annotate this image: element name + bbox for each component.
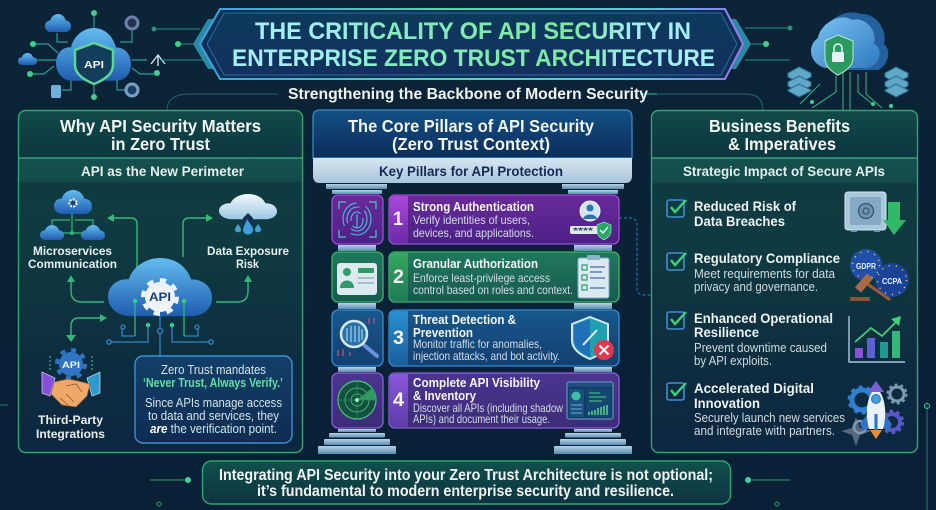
arrows around API cloud <box>66 214 252 342</box>
bottom callout <box>202 461 730 504</box>
card: Discover all APIs (including shadow <box>413 401 563 415</box>
icon: dashboard <box>567 382 613 419</box>
text <box>694 198 796 229</box>
text: Reduced Risk of <box>694 198 796 214</box>
icon: third-party handshake: API <box>62 360 80 371</box>
title text <box>232 18 715 72</box>
icon: rocket with gears <box>841 381 906 446</box>
card: Complete API Visibility <box>413 375 541 390</box>
heading: Business Benefits <box>709 116 850 136</box>
icon: safe and down arrow <box>845 192 906 235</box>
label: microservices communication <box>28 244 117 271</box>
panel: why API security matters <box>18 110 302 452</box>
label: third-party integrations <box>36 413 105 441</box>
card: & Inventory <box>413 388 477 403</box>
card: 4 <box>393 390 404 411</box>
icon: central API cloud and gear <box>108 258 212 336</box>
label: data exposure risk: Risk <box>236 257 259 271</box>
panel header: The Core Pillars of API Security <box>348 116 594 136</box>
card: Threat Detection & <box>413 312 516 327</box>
icon: user and password shield <box>570 201 611 240</box>
text: privacy and governance. <box>694 280 818 294</box>
icon: shield with red cross <box>572 317 614 360</box>
panel header: Key Pillars for API Protection <box>379 163 563 179</box>
card: 1 <box>393 209 403 230</box>
subtitle: Strengthening the Backbone of Modern Security <box>288 86 648 103</box>
text: Accelerated Digital <box>694 380 814 396</box>
bottom callout: it’s fundamental to modern enterprise security and resilience. <box>257 483 674 500</box>
benefit 3: operational resilience <box>667 310 905 368</box>
card: injection attacks, and bot activity. <box>413 349 560 363</box>
heading: & Imperatives <box>728 134 836 154</box>
label: microservices communication: Microservices <box>33 244 112 258</box>
card <box>389 195 619 244</box>
icon: ID card <box>332 252 383 302</box>
circuit traces under API cloud <box>107 316 213 356</box>
text: by API exploits. <box>694 354 772 368</box>
text <box>694 310 833 368</box>
label: data exposure risk: Data Exposure <box>207 244 289 258</box>
icon: growth chart <box>849 316 905 362</box>
icon: checkbox <box>667 383 686 400</box>
icon: shield with API label <box>75 43 113 84</box>
label: data exposure risk <box>207 244 289 271</box>
banner side connectors <box>152 26 792 60</box>
icon: GDPR CCPA badges with gavel: CCPA <box>882 277 902 286</box>
icon: user and password shield: **** <box>573 226 594 236</box>
icon: left server stack <box>788 67 811 97</box>
callout: never trust, always verify: Since APIs manage access <box>145 396 282 410</box>
benefit 1: reduced risk <box>667 192 906 235</box>
callout: never trust, always verify: ‘Never Trust, Always Verify.’ <box>143 376 283 390</box>
heading <box>709 116 850 154</box>
title text: THE CRITICALITY OF API SECURITY IN <box>255 18 691 45</box>
callout: never trust, always verify: to data and services, they <box>148 409 280 423</box>
card <box>389 252 619 302</box>
icon: secure cloud with servers <box>788 12 908 110</box>
icon: radar <box>332 373 383 428</box>
card: Strong Authentication <box>413 199 534 214</box>
label: third-party integrations: Integrations <box>36 427 105 441</box>
card <box>389 310 619 366</box>
benefit 4: digital innovation <box>667 380 906 446</box>
icon: third-party handshake <box>42 350 100 407</box>
callout: never trust, always verify: Zero Trust mandates <box>161 363 266 377</box>
subheading: Strategic Impact of Secure APIs <box>683 164 885 179</box>
card: 3 <box>393 328 404 349</box>
panel header: (Zero Trust Context) <box>392 134 550 154</box>
pillar 3: threat detection and prevention <box>332 310 619 366</box>
bottom callout: Integrating API Security into your Zero Trust Architecture is not optional; <box>219 467 713 484</box>
heading: Why API Security Matters <box>60 116 261 136</box>
card: Granular Authorization <box>413 256 538 271</box>
panel: business benefits <box>652 110 918 452</box>
icon: microservices clouds <box>40 190 105 240</box>
dashed connector to benefits panel <box>619 218 651 295</box>
card: control based on roles and context. <box>413 283 573 297</box>
icon: API cloud shield network <box>18 10 165 100</box>
text: Enhanced Operational <box>694 310 833 326</box>
benefit 2: regulatory compliance <box>667 249 909 301</box>
icon: checkbox <box>667 253 686 270</box>
card: Monitor traffic for anomalies, <box>413 337 542 351</box>
icon: shield with API label: API <box>84 59 104 71</box>
label: third-party integrations: Third-Party <box>38 413 103 427</box>
heading <box>60 116 261 154</box>
icon: checkbox <box>667 200 686 217</box>
icon: magnifier <box>332 310 383 366</box>
pillar 4: complete API visibility and inventory <box>332 373 619 428</box>
label: microservices communication: Communication <box>28 257 117 271</box>
title text: ENTERPRISE ZERO TRUST ARCHITECTURE <box>232 45 715 72</box>
icon: GDPR CCPA badges with gavel: GDPR <box>856 262 876 271</box>
text: Innovation <box>694 395 760 411</box>
text <box>694 250 840 294</box>
icon: green shield lock <box>825 35 853 75</box>
card: Prevention <box>413 325 473 340</box>
callout: never trust, always verify: are the verification point. <box>150 422 277 436</box>
callout: never trust, always verify <box>135 356 292 443</box>
panel: core pillars <box>313 110 651 454</box>
card: Verify identities of users, <box>413 213 530 227</box>
card: APIs) and document their usage. <box>413 412 550 426</box>
icon: clipboard checklist <box>578 255 609 298</box>
subheading: API as the New Perimeter <box>81 164 245 179</box>
pillar 2: granular authorization <box>332 252 619 302</box>
icon: data exposure cloud <box>219 194 277 234</box>
text: Resilience <box>694 324 759 340</box>
icon: right server stack <box>885 67 908 97</box>
column capitals and bases <box>318 184 632 454</box>
text: and integrate with partners. <box>694 424 835 438</box>
card: Enforce least-privilege access <box>413 271 550 285</box>
panel header <box>313 110 632 183</box>
text <box>694 380 845 438</box>
icon: checkbox <box>667 312 686 329</box>
text: Securely launch new services <box>694 411 845 425</box>
text: Data Breaches <box>694 213 785 229</box>
icon: fingerprint <box>332 195 383 244</box>
icon: central API cloud and gear: API <box>149 290 171 304</box>
text: Meet requirements for data <box>694 267 835 281</box>
card: 2 <box>393 267 404 288</box>
icon: GDPR CCPA badges with gavel <box>850 249 909 301</box>
heading: in Zero Trust <box>111 134 210 154</box>
text: Prevent downtime caused <box>694 341 827 355</box>
card <box>389 373 619 428</box>
pillar 1: strong authentication <box>332 195 619 244</box>
text: Regulatory Compliance <box>694 250 840 266</box>
card: devices, and applications. <box>413 226 534 240</box>
title banner <box>193 9 751 79</box>
